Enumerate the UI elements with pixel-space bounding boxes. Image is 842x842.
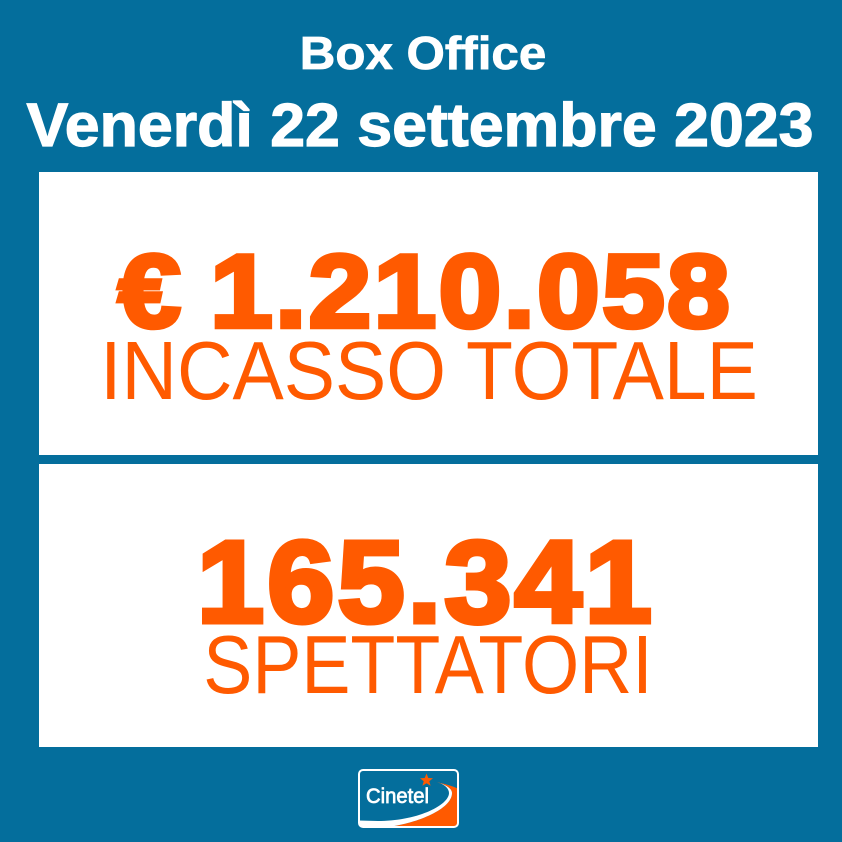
title: Box Office: Box Office: [300, 27, 546, 79]
logo: Cinetel: Cinetel: [366, 785, 429, 808]
total revenue figure: € 1.210.058: [117, 234, 732, 350]
subtitle: date: Venerdì 22 settembre 2023: [26, 91, 814, 159]
panel: spettatori: [39, 464, 818, 747]
logo: Cinetel: [358, 769, 459, 828]
revenue label: INCASSO TOTALE: [100, 324, 757, 417]
spectators label: SPETTATORI: [203, 618, 652, 711]
panel: incasso totale: [39, 172, 818, 455]
spectators figure: 165.341: [197, 517, 655, 647]
